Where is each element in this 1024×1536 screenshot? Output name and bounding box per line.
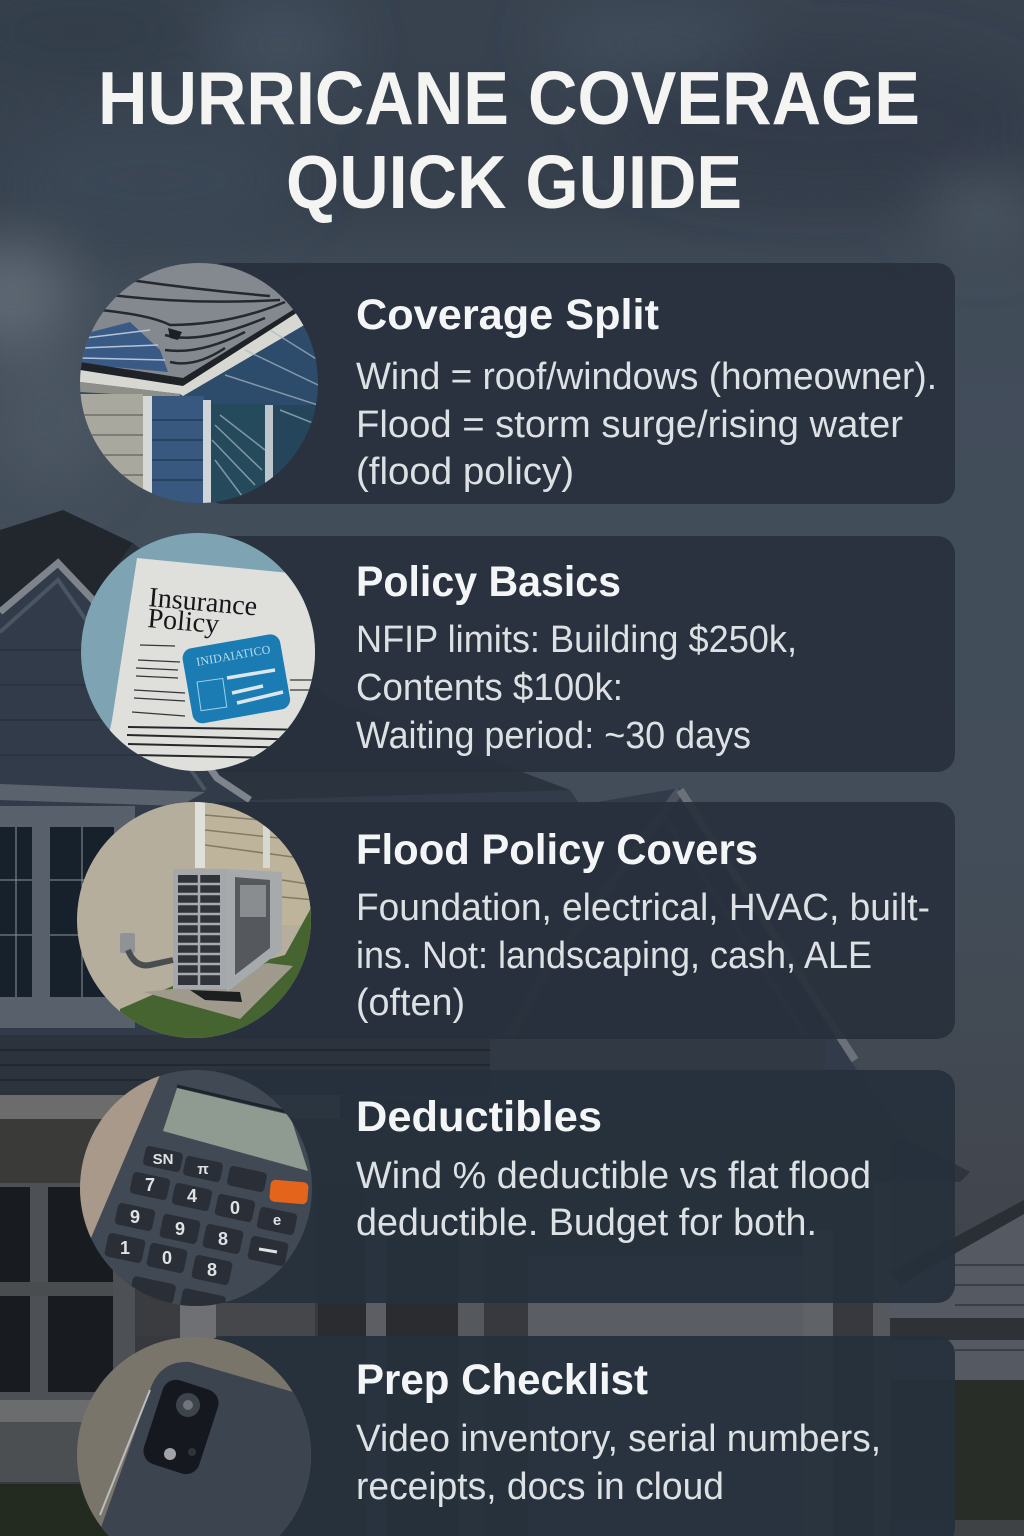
icon: policy document and card [78,530,320,775]
body text: (often) [356,982,465,1024]
icon: calculator: 8 [218,1229,228,1249]
heading: Policy Basics [356,558,621,606]
icon: policy document and card: Insurance [147,582,259,622]
heading: Deductibles [356,1093,602,1141]
icon: policy document and card: Policy [146,603,220,640]
title: HURRICANE COVERAGE [98,56,920,140]
upper window [0,806,135,1028]
icon: calculator [78,1068,314,1316]
icon: policy document and card: INIDAIATICO [195,642,272,669]
background: house photo [0,510,1024,1536]
left roof lower [93,543,570,800]
icon: calculator: 8 [207,1260,217,1280]
icon: calculator: SN [153,1151,173,1168]
columns [180,1300,216,1340]
icon: calculator: e [273,1212,281,1229]
house body [0,563,970,1536]
heading: Flood Policy Covers [356,826,758,874]
body text: Wind % deductible vs flat flood [356,1155,871,1197]
body text [356,1418,881,1508]
body text: (flood policy) [356,451,574,493]
body text: Foundation, electrical, HVAC, built- [356,887,930,929]
panel: policy basics [78,530,955,775]
icon: calculator: 0 [230,1198,240,1218]
body text: Wind = roof/windows (homeowner). [356,356,937,398]
body text: deductible. Budget for both. [356,1202,817,1244]
body text: receipts, docs in cloud [356,1466,724,1508]
title: QUICK GUIDE [286,140,742,224]
middle roof band [0,1035,490,1095]
icon: calculator: 4 [187,1186,197,1206]
body text [356,887,930,1024]
body text: Flood = storm surge/rising water [356,404,903,446]
panel: flood policy covers [75,800,955,1040]
heading: Coverage Split [356,291,659,339]
heading: Prep Checklist [356,1356,648,1404]
icon: wind damaged roof [78,262,320,505]
gable trim [0,563,250,800]
icon: calculator: 1 [120,1238,130,1258]
panel: prep checklist [75,1335,955,1536]
body text: Video inventory, serial numbers, [356,1418,881,1460]
body text [356,1155,871,1244]
left roof upper [0,510,133,612]
body text: ins. Not: landscaping, cash, ALE [356,935,872,977]
panel: deductibles [78,1068,955,1316]
body text: NFIP limits: Building $250k, [356,619,797,661]
icon: calculator: π [197,1161,209,1178]
icon: calculator: 9 [130,1207,140,1227]
title [98,56,920,224]
body text: Waiting period: ~30 days [356,715,751,757]
central gable [497,790,680,1060]
body text [356,356,937,493]
band above upper window [0,784,205,806]
grass and driveway [890,1380,1024,1520]
right neighbouring house [890,1207,1024,1380]
panel: coverage split [78,262,955,505]
body text [356,619,797,757]
body text: Contents $100k: [356,667,623,709]
icon: calculator: 7 [145,1175,155,1195]
siding lines [0,650,820,1000]
icon: HVAC unit [75,800,315,1040]
icon: phone camera [75,1335,315,1536]
icon: calculator: 0 [162,1248,172,1268]
lower wall [0,1119,890,1536]
icon: calculator: 9 [175,1219,185,1239]
lower window [0,1183,135,1408]
garage door [528,1255,803,1536]
